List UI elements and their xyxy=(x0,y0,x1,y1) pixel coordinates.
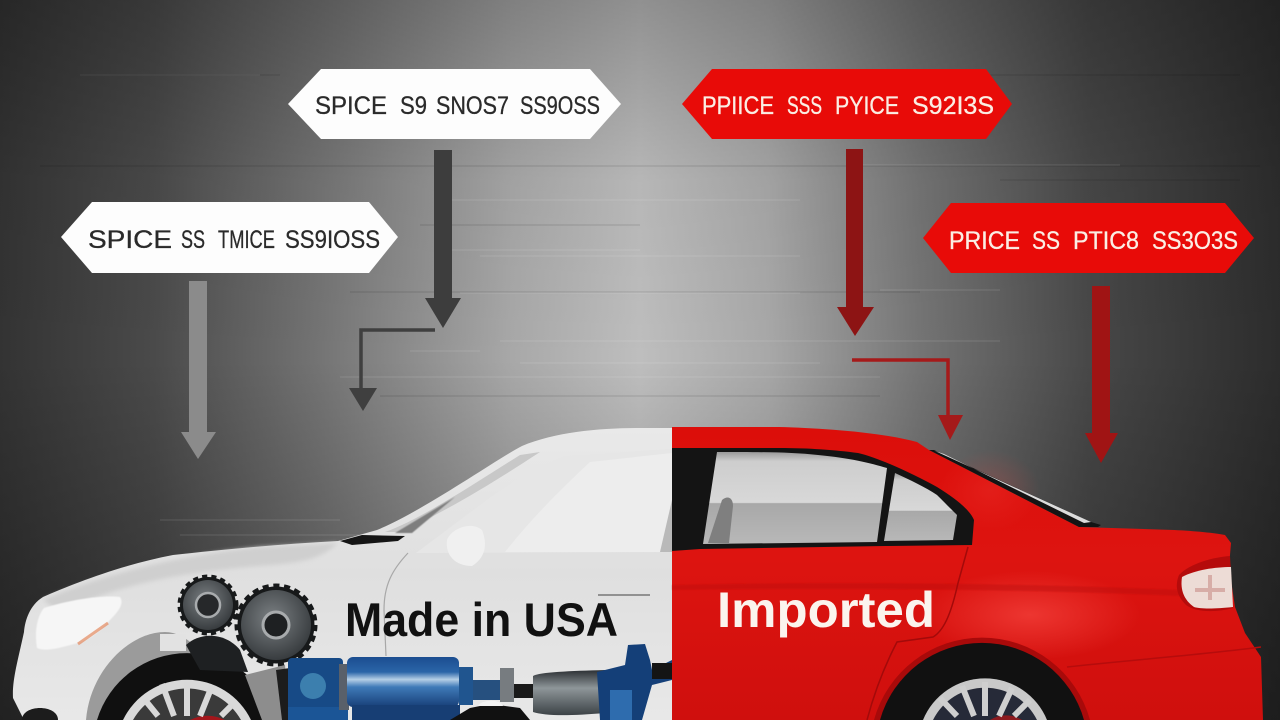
label: white hexagon top: S9 xyxy=(400,92,427,120)
label: red hexagon top: SSS xyxy=(787,92,822,120)
door seam xyxy=(867,547,968,720)
label: red hexagon top: PPIICE xyxy=(702,92,774,120)
car: red half xyxy=(672,427,1263,720)
rear windshield strip xyxy=(929,450,1101,527)
label: white hexagon left: SS9IOSS xyxy=(285,226,380,254)
pump block xyxy=(288,658,343,720)
rear tyre xyxy=(880,643,1084,720)
headlight xyxy=(36,597,122,650)
window frame xyxy=(672,448,974,551)
grey cylinder xyxy=(533,670,605,715)
connector xyxy=(459,667,473,705)
label: white hexagon top: SNOS7 xyxy=(436,92,509,120)
label: red hexagon top: PYICE xyxy=(835,92,899,120)
label: red hexagon right: SS3O3S xyxy=(1152,227,1238,255)
body highlight xyxy=(920,570,1140,660)
seat silhouette xyxy=(708,498,733,543)
hood shading xyxy=(43,543,338,612)
windshield strip xyxy=(385,452,540,532)
tail light xyxy=(1177,556,1233,611)
label: white hexagon left: SS xyxy=(181,226,205,254)
icon: engine xyxy=(245,644,672,720)
arrow: dark red down xyxy=(837,149,874,336)
arrow: dark bent xyxy=(349,330,435,411)
car: white half xyxy=(13,428,672,720)
arrow: dark down xyxy=(425,150,461,328)
door seam xyxy=(384,553,408,656)
label: white hexagon top: SS9OSS xyxy=(520,92,600,120)
label: white hexagon left: SPICE xyxy=(88,226,172,254)
marker light xyxy=(160,634,186,651)
front side glass xyxy=(703,452,887,544)
label: white hexagon left: TMICE xyxy=(218,226,275,254)
wheel arch xyxy=(86,632,250,720)
white car body xyxy=(13,428,672,720)
label: red hexagon right: PRICE xyxy=(949,227,1020,255)
arrow: red down xyxy=(1085,286,1118,463)
body crease xyxy=(672,583,1180,596)
rear side glass xyxy=(884,473,957,541)
front wheel rim xyxy=(123,680,251,720)
wiper xyxy=(340,535,405,545)
blue machine xyxy=(597,644,672,720)
label: white hexagon top xyxy=(288,69,621,139)
text: imported: Imported xyxy=(717,582,935,638)
arrow: red bent xyxy=(852,360,963,440)
label: red hexagon top: S92I3S xyxy=(912,92,994,120)
label: white hexagon left xyxy=(61,202,398,273)
icon: gears xyxy=(180,577,314,672)
label: red hexagon right: PTIC8 xyxy=(1073,227,1139,255)
side window xyxy=(416,449,672,553)
red car body xyxy=(672,427,1263,720)
wing mirror xyxy=(447,526,485,566)
label: white hexagon top: SPICE xyxy=(315,92,387,120)
arrow: grey down xyxy=(181,281,216,459)
front tyre xyxy=(97,653,277,720)
front grille shadow xyxy=(22,708,58,720)
text: made in usa: Made in USA xyxy=(345,593,618,646)
blue cylinder xyxy=(347,657,459,707)
label: red hexagon right: SS xyxy=(1032,227,1060,255)
rear wheel rim xyxy=(923,678,1047,720)
label: red hexagon right xyxy=(923,203,1254,273)
rear wheel arch xyxy=(874,638,1090,720)
label: red hexagon top xyxy=(682,69,1012,139)
